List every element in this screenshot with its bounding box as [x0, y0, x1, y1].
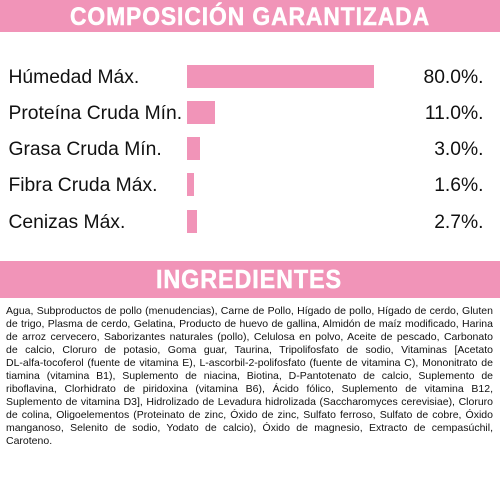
row: humidity: Húmedad Máx. [8, 67, 139, 88]
panel: composition header band [0, 0, 500, 32]
row: ash: Cenizas Máx. [8, 212, 125, 233]
row: fat: Grasa Cruda Mín. [8, 139, 162, 160]
text block: ingredients list: riboflavina, Clorhidrato de piridoxina (vitamina B6), Ácido fólico, Suplemento de vitamina B12, [6, 383, 493, 395]
text block: ingredients list: Caroteno. [6, 435, 52, 447]
row: ash [8, 210, 484, 233]
text block: ingredients list: de arroz cervecero, Saborizantes naturales (pollo), Celulosa en polvo, Aceite de pescado, Carbonato [6, 331, 493, 343]
text block: ingredients list: de calcio, Cloruro de potasio, Goma guar, Taurina, Tripolifosfato de sodio, Vitaminas [Acetato [6, 344, 493, 356]
row: ash: 2.7%. [434, 212, 484, 233]
row: fibre: Fibra Cruda Máx. [8, 175, 157, 196]
row: fat [8, 137, 484, 160]
text block: ingredients list [6, 305, 493, 447]
text block: ingredients list: Agua, Subproductos de pollo (menudencias), Carne de Pollo, Hígado de pollo, Hígado de cerdo, Gluten [6, 305, 493, 317]
text block: ingredients list: DL-alfa-tocoferol (fuente de vitamina E), L-ascorbil-2-polifosfato (fuente de vitamina C), Mononitrato de [6, 357, 493, 369]
row: humidity [8, 65, 484, 88]
row: fibre [8, 173, 484, 196]
text block: ingredients list: manganoso, Selenito de sodio, Yodato de calcio), Óxido de magnesio, Extracto de cempasúchil, [6, 422, 493, 434]
row: protein [8, 101, 484, 124]
text block: ingredients list: tiamina (vitamina B1), Suplemento de niacina, Biotina, D-Pantotenato de calcio, Suplemento de [6, 370, 493, 382]
heading: ingredients: INGREDIENTES [156, 264, 342, 294]
row: humidity: 80.0%. [423, 67, 484, 88]
text block: ingredients list: de colina, Oligoelementos (Proteinato de zinc, Óxido de zinc, Sulfato ferroso, Sulfato de cobre, Óxido [6, 409, 493, 421]
row: fat: 3.0%. [434, 139, 484, 160]
text block: ingredients list: Suplemento de vitamina D3], Hidrolizado de Levadura hidrolizada (Saccharomyces cerevisiae), Cloruro [6, 396, 493, 408]
text block: ingredients list: de trigo, Plasma de cerdo, Gelatina, Producto de huevo de gallina, Almidón de maíz modificado, Harina [6, 318, 493, 330]
panel: ingredients header band [0, 261, 500, 298]
row: fibre: 1.6%. [434, 175, 484, 196]
row: protein: Proteína Cruda Mín. [8, 103, 182, 124]
row: protein: 11.0%. [425, 103, 484, 124]
heading: composition: COMPOSICIÓN GARANTIZADA [70, 1, 430, 31]
